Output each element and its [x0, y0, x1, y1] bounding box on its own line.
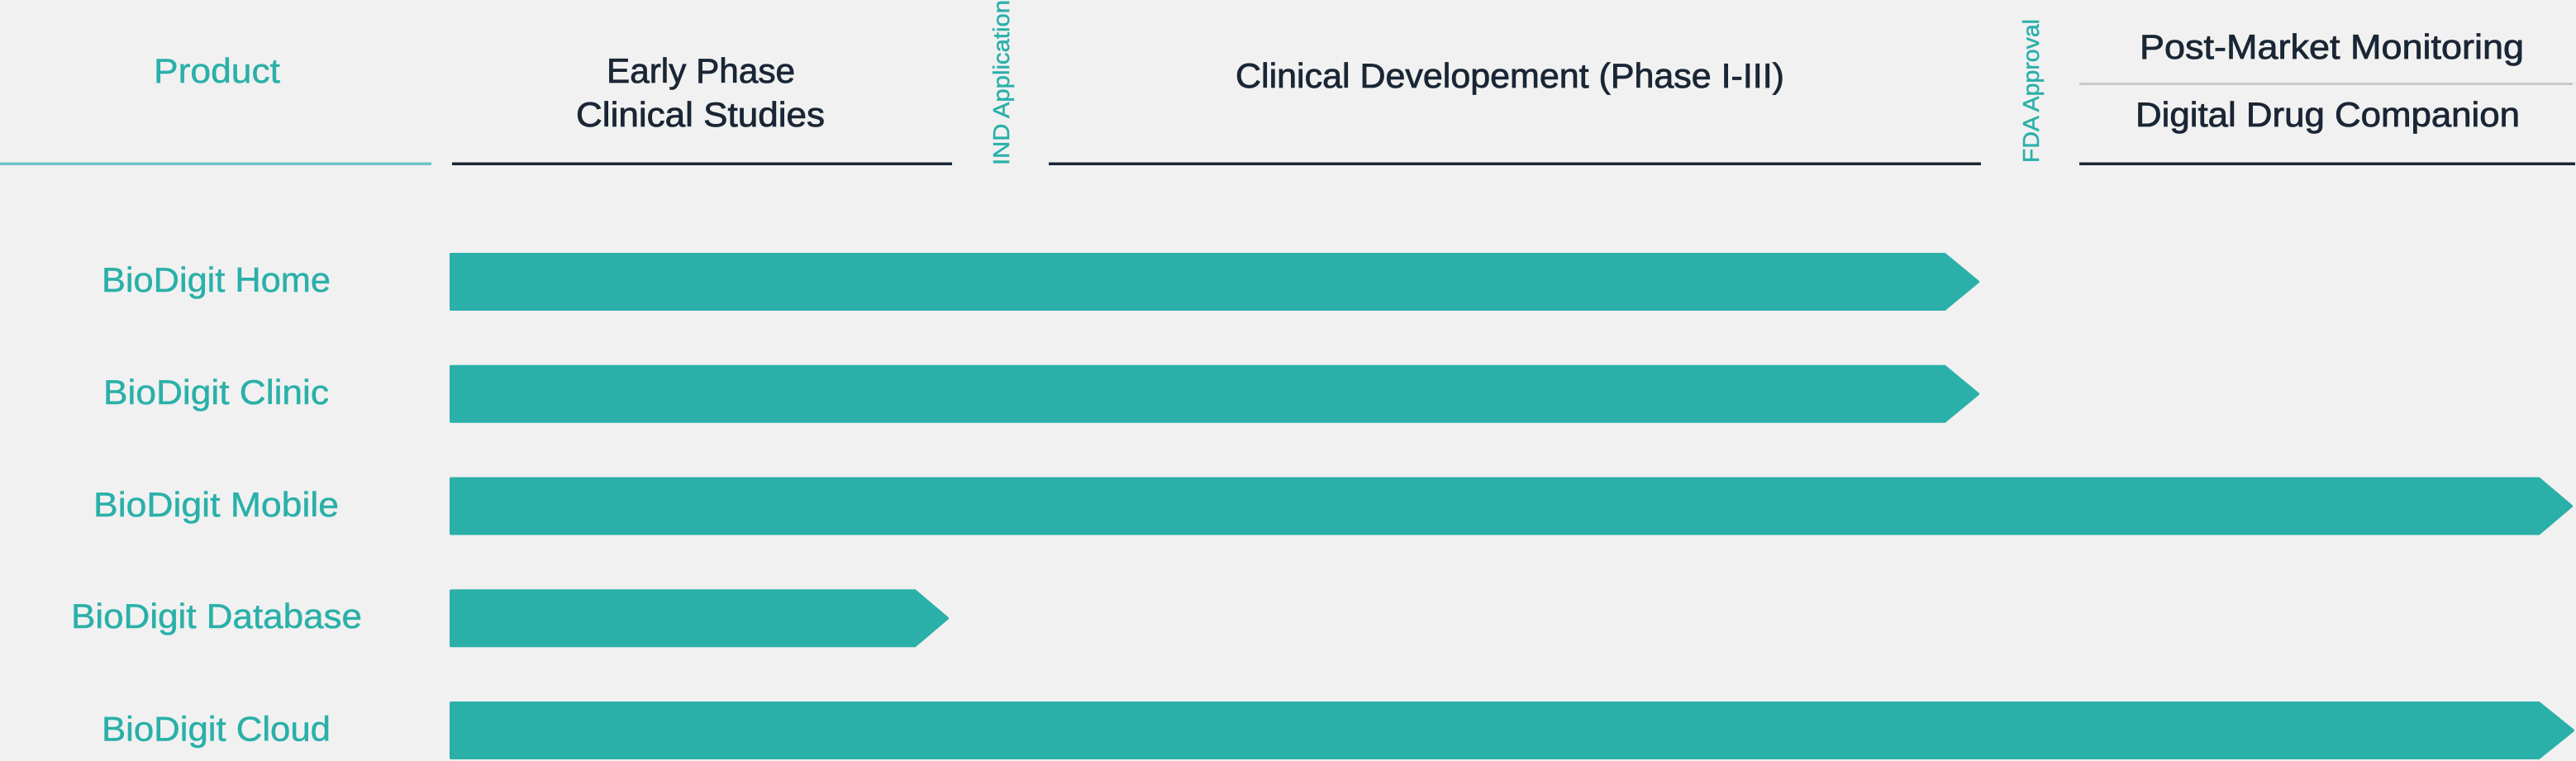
header: post-market and digital companion: Post-Market Monitoring	[2140, 27, 2524, 66]
row: BioDigit Cloud	[102, 703, 2573, 758]
header: clinical development: Clinical Developement (Phase I-III)	[1236, 56, 1784, 95]
row: BioDigit Home	[102, 254, 1978, 309]
row: BioDigit Mobile	[93, 479, 2571, 534]
milestone: IND application: IND Application	[988, 0, 1014, 165]
row: BioDigit Database	[71, 591, 947, 645]
row: BioDigit Database: BioDigit Database	[71, 597, 362, 635]
header: clinical development	[1049, 56, 1981, 165]
header: early phase clinical studies	[452, 51, 952, 165]
header: early phase clinical studies: Early Phase	[607, 51, 795, 90]
row: BioDigit Clinic: BioDigit Clinic	[103, 373, 329, 411]
row: BioDigit Mobile: BioDigit Mobile	[93, 485, 339, 524]
row: BioDigit Clinic	[103, 367, 1978, 421]
header: product column	[0, 51, 431, 165]
header: post-market and digital companion	[2079, 27, 2575, 165]
row: BioDigit Home: BioDigit Home	[102, 260, 331, 299]
header: post-market and digital companion: Digital Drug Companion	[2136, 95, 2520, 134]
header: product column: Product	[154, 51, 280, 90]
row: BioDigit Cloud: BioDigit Cloud	[102, 709, 331, 749]
header: early phase clinical studies: Clinical Studies	[576, 95, 825, 134]
milestone: FDA approval: FDA Approval	[2018, 19, 2044, 163]
